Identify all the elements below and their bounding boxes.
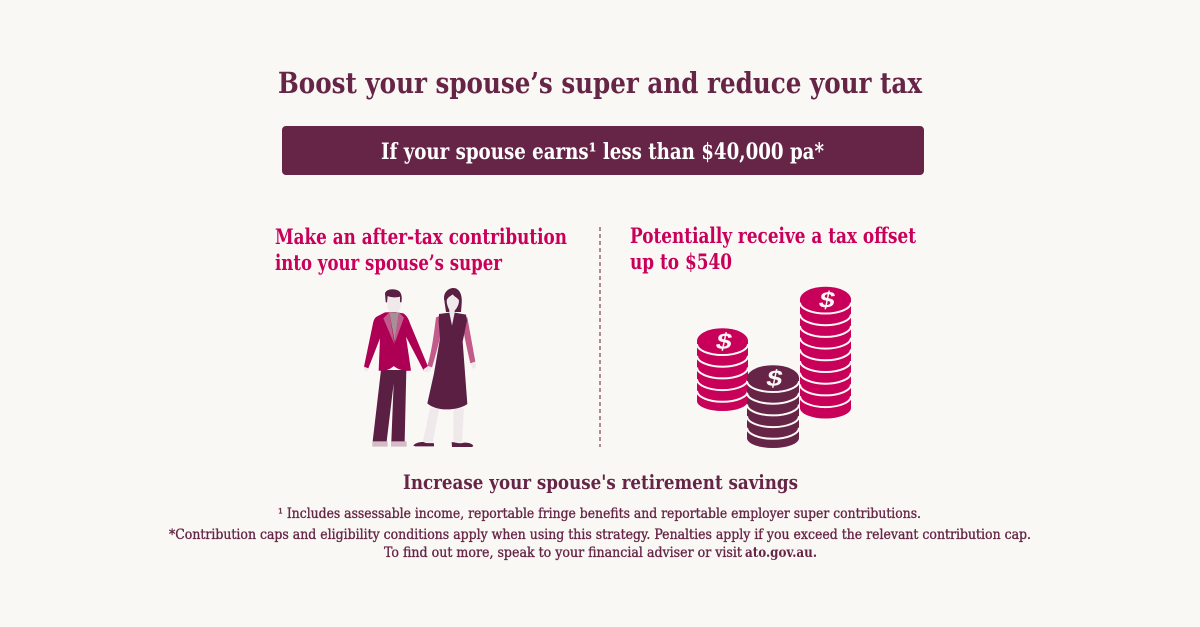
icon: coin stacks xyxy=(697,287,851,448)
footnotes: *Contribution caps and eligibility conditions apply when using this strategy. Penalties apply if you exceed the relevant contribution cap. xyxy=(169,527,1031,543)
icon: couple holding hands xyxy=(364,288,476,447)
footnotes: ato.gov.au. xyxy=(745,545,817,561)
heading: tax offset: up to $540 xyxy=(630,250,732,275)
heading: after-tax contribution xyxy=(275,225,567,276)
footnotes: ¹ Includes assessable income, reportable fringe benefits and reportable employer super contributions. xyxy=(278,506,921,522)
subheading: Increase your spouse's retirement savings xyxy=(403,470,798,494)
coin stack: right pink xyxy=(800,287,851,418)
woman xyxy=(413,288,476,447)
footnotes xyxy=(169,506,1031,561)
man xyxy=(364,289,431,447)
heading: tax offset: Potentially receive a tax offset xyxy=(630,224,916,249)
coin stack: left pink xyxy=(697,328,748,411)
footnotes: To find out more, speak to your financial adviser or visit xyxy=(384,545,743,561)
coin stack: middle plum xyxy=(747,365,799,448)
coin stack: middle plum: $ xyxy=(764,366,785,391)
banner xyxy=(282,126,924,175)
heading: after-tax contribution: into your spouse’s super xyxy=(275,251,503,276)
title: Boost your spouse’s super and reduce your tax xyxy=(278,66,923,100)
heading: after-tax contribution: Make an after-tax contribution xyxy=(275,225,567,250)
banner: If your spouse earns¹ less than $40,000 pa* xyxy=(381,139,824,165)
coin stack: left pink: $ xyxy=(714,329,734,354)
heading: tax offset xyxy=(630,224,916,275)
coin stack: right pink: $ xyxy=(817,288,837,313)
